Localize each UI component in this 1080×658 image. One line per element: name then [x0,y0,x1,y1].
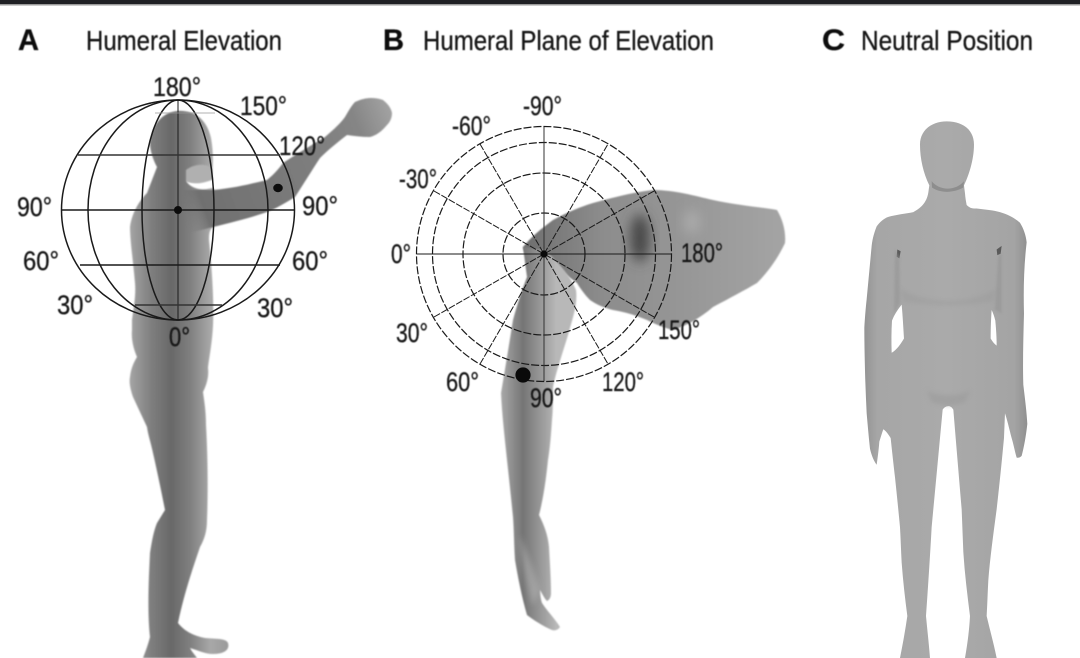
plane angle labels [391,91,723,413]
elevation angle labels: 60° [292,246,328,276]
plane angle labels: -60° [452,111,491,141]
heading C: C [822,24,845,57]
highlight under head [186,165,213,183]
plane angle labels: 30° [396,318,428,348]
gaps between arms and torso [891,305,904,353]
plane angle labels: 180° [681,238,723,268]
plane angle labels: 90° [530,383,562,413]
plane angle labels: 150° [658,315,700,345]
elevation angle labels: 30° [257,293,293,323]
figure: top view with arm [501,190,785,630]
polar grid [416,126,672,382]
elevation angle labels: 30° [57,290,93,320]
plane angle labels: 120° [602,367,644,397]
elevation angle labels: 180° [153,72,201,102]
plane angle labels: -30° [399,164,437,194]
plane angle labels: 0° [391,239,411,269]
heading B: B [383,24,404,57]
plane angle labels: 60° [446,367,479,397]
panel A: humeral elevation [17,72,392,658]
pivot marker and arm marker [174,184,283,214]
heading A [18,24,282,57]
elevation angle labels: 60° [23,246,59,276]
elevation angle labels: 0° [169,322,190,352]
heading A: A [18,24,39,57]
elevation angle labels [17,72,338,352]
pivot marker and arm marker [515,250,548,383]
panel B: humeral plane of elevation [391,91,785,630]
heading B: Humeral Plane of Elevation [423,25,714,56]
plane angle labels: -90° [523,91,562,121]
figure: side view with raised arm [130,98,392,658]
heading C [822,24,1033,57]
body shading [900,289,997,305]
heading A: Humeral Elevation [86,25,282,56]
elevation angle labels: 90° [302,191,338,221]
elevation angle labels: 120° [279,131,325,161]
heading C: Neutral Position [861,25,1033,56]
sphere grid [62,100,295,320]
top dark bar [0,0,1080,6]
panel C: neutral position figure [864,121,1027,658]
elevation angle labels: 90° [17,192,52,222]
elevation angle labels: 150° [240,91,287,121]
